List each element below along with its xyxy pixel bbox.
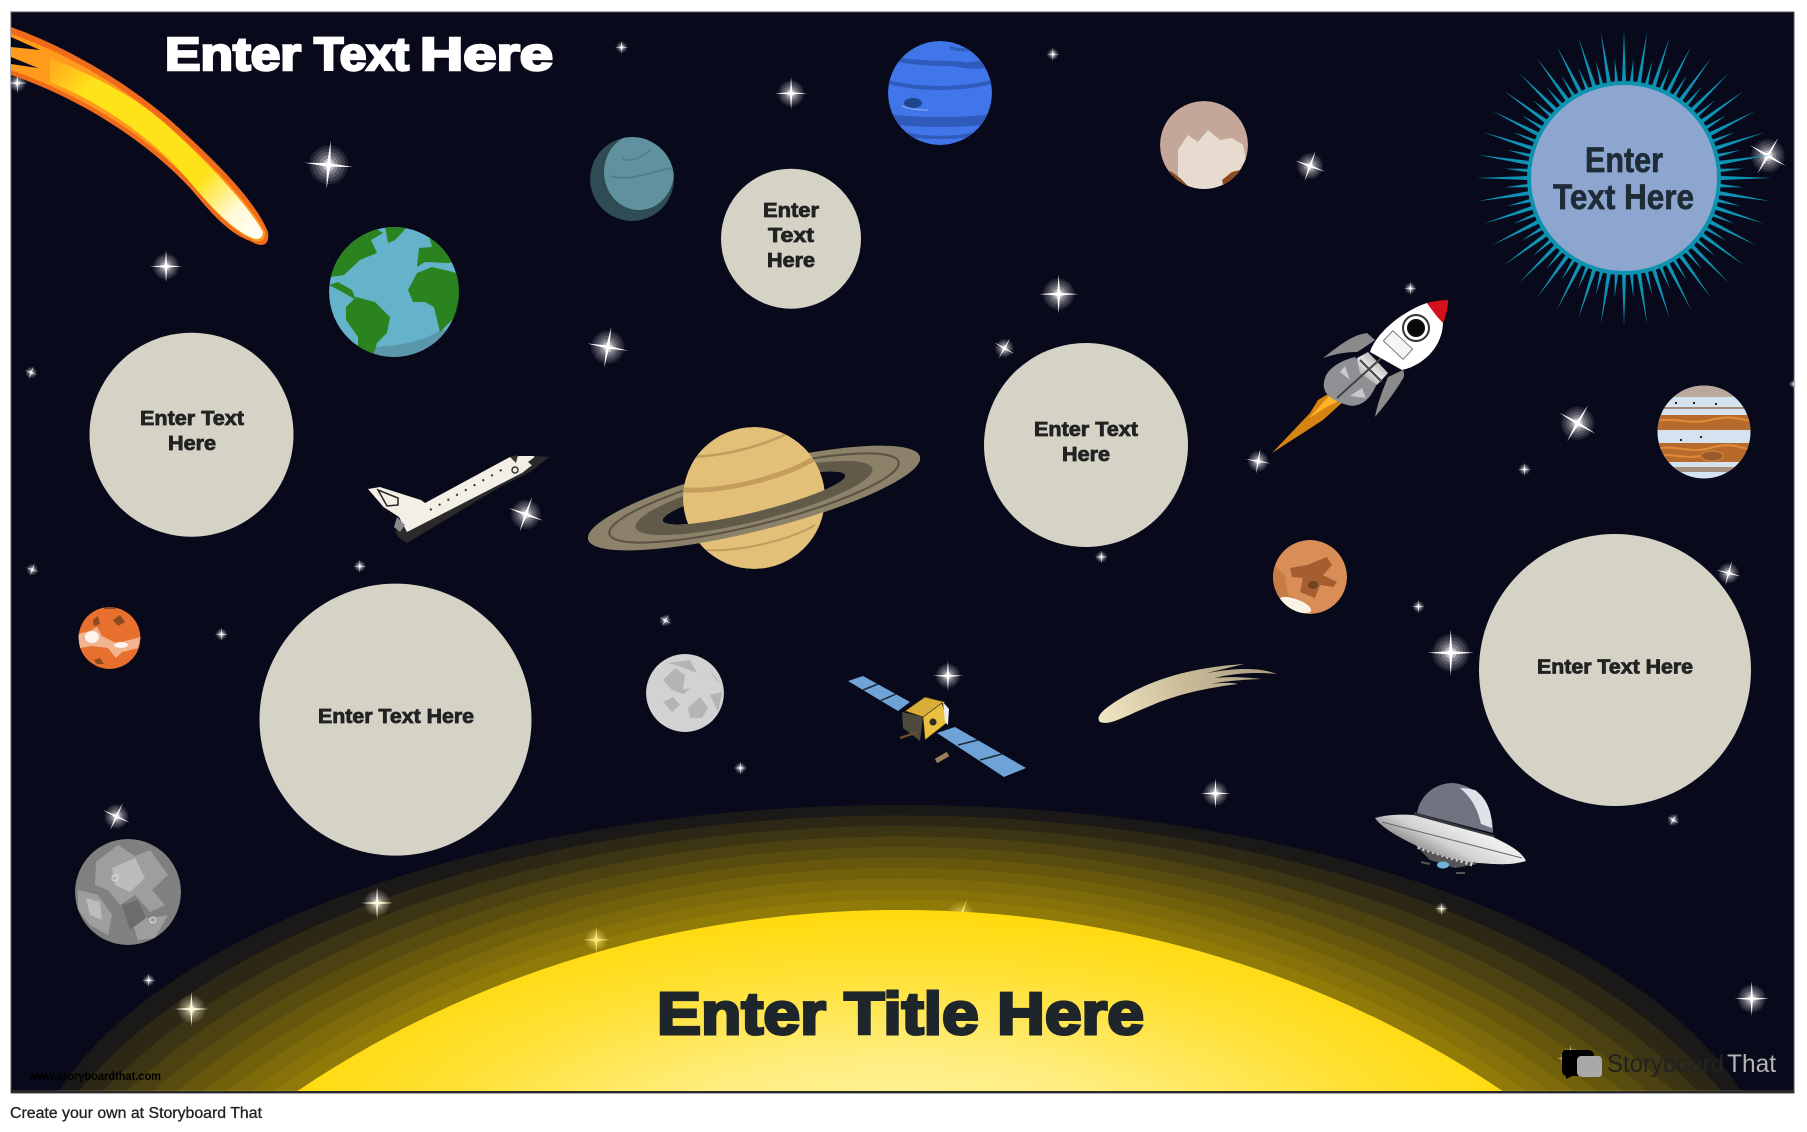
- sun glow bands: [58, 805, 1742, 1092]
- circle: left text: Enter Text: [140, 408, 244, 430]
- burst text: [1553, 147, 1694, 210]
- nose cone: [1427, 300, 1448, 323]
- planet: teal ice giant: [590, 134, 674, 221]
- burst text: Text Here: [1553, 178, 1694, 217]
- saturn ring front: [588, 458, 920, 550]
- logo: [1562, 1050, 1776, 1079]
- burst text: Enter: [1585, 141, 1663, 180]
- planet: earth: [328, 224, 463, 362]
- bottom edge line: [11, 1090, 1794, 1093]
- shuttle: [368, 455, 549, 543]
- planet: jupiter: [1657, 385, 1751, 479]
- ufo: [1375, 783, 1526, 873]
- rays: [1476, 30, 1772, 326]
- nozzle section: [1357, 352, 1388, 385]
- planet: neptune: [888, 41, 995, 145]
- exhaust cloud: [1324, 357, 1377, 406]
- small comet: [1098, 664, 1277, 723]
- planet: saturn: [580, 425, 928, 571]
- planet: grey cratered: [75, 839, 181, 945]
- planet: moon: [646, 654, 724, 732]
- planet: orange mercury: [78, 607, 140, 669]
- ufo saucer: [1375, 815, 1526, 864]
- flame: [1272, 394, 1342, 453]
- burst disc: [1529, 83, 1719, 273]
- fins: [1323, 333, 1375, 358]
- circle: top text: [721, 169, 861, 309]
- ufo dome: [1417, 783, 1493, 833]
- circle: top text: Enter: [763, 200, 819, 222]
- heading: top: [165, 28, 553, 80]
- porthole: [1403, 315, 1429, 341]
- circle: lower left text: [260, 584, 532, 856]
- watermark url: www.storyboardthat.com: [28, 1069, 161, 1083]
- body: [1370, 303, 1443, 370]
- logo text: Storyboard: [1607, 1050, 1724, 1078]
- circle: left text: Here: [168, 433, 216, 455]
- circle: right text: [1479, 534, 1751, 806]
- planet: pluto: [1160, 101, 1250, 192]
- satellite: [848, 676, 1026, 777]
- rocket: [1272, 300, 1448, 453]
- planet: mars: [1272, 540, 1347, 616]
- footer text: Create your own at Storyboard That: [10, 1105, 263, 1122]
- saturn ring back: [588, 446, 920, 550]
- circle: top text: Here: [767, 250, 815, 272]
- logo icon: [1562, 1050, 1602, 1079]
- circle: right text: Enter Text Here: [1537, 656, 1693, 678]
- hatch: [1383, 331, 1413, 359]
- circle: top text: Text: [768, 225, 814, 247]
- heading: top: Text: [314, 28, 409, 80]
- title: Enter Title Here: [657, 981, 1144, 1047]
- circle: center right text: [984, 343, 1188, 547]
- saturn body: [683, 427, 825, 569]
- heading: top: Here: [420, 28, 553, 80]
- sun core: [296, 910, 1504, 1092]
- circle: center right text: Enter Text: [1034, 419, 1138, 441]
- heading: top: Enter: [165, 28, 301, 80]
- blue burst: [1476, 30, 1772, 326]
- circle: lower left text: Enter Text Here: [318, 706, 474, 728]
- circle: center right text: Here: [1062, 444, 1110, 466]
- ufo underside lights: [1415, 845, 1478, 868]
- logo text second word: That: [1727, 1050, 1776, 1078]
- circle: left text: [90, 333, 294, 537]
- comet: fireball top left: [11, 27, 268, 245]
